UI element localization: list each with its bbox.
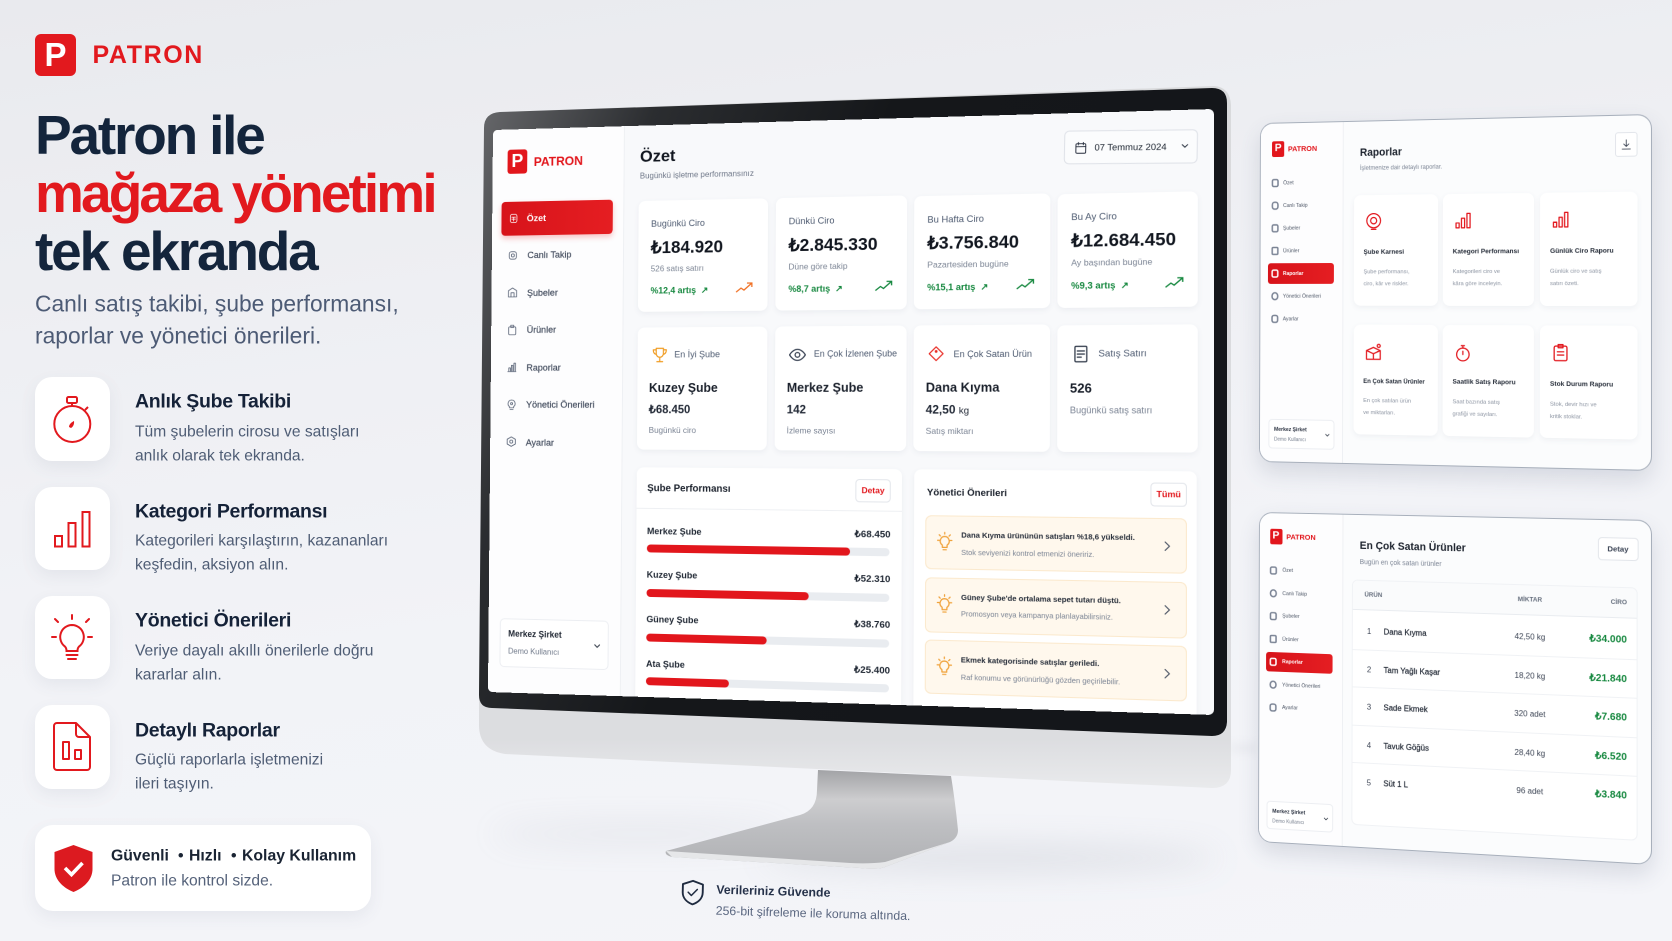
row: Süt 1 L: 5 — [1367, 779, 1371, 788]
icon: stopwatch — [35, 377, 110, 461]
bar row: Güney Şube: Güney Şube — [646, 614, 698, 625]
KPI card: Bu Ay Ciro: ₺12.684.450 — [1071, 229, 1176, 251]
Ürünler sidebar: P — [1272, 530, 1279, 542]
bar row: Merkez Şube — [646, 526, 891, 556]
report card: Günlük Ciro Raporu: Günlük ciro ve satış — [1550, 269, 1602, 275]
row: Süt 1 L: ₺3.840 — [1595, 789, 1627, 802]
row: Sade Ekmek: 320 adet — [1514, 709, 1545, 719]
row: Tam Yağlı Kaşar: 18,20 kg — [1515, 671, 1545, 681]
report card: Stok Durum Raporu — [1540, 325, 1638, 440]
page heading: Bugünkü işletme performansınız — [640, 169, 754, 181]
KPI card: Bu Hafta Ciro — [914, 193, 1050, 309]
report card: Şube Karnesi: Şube performansı, — [1363, 269, 1409, 275]
report card: Günlük Ciro Raporu: satırı özeti. — [1550, 281, 1579, 287]
button: Detay — [1598, 537, 1638, 561]
panel: Raporlar screen — [1259, 114, 1652, 471]
highlight card: Satış Satırı: Bugünkü satış satırı — [1070, 405, 1152, 416]
highlight card: En Çok İzlenen Şube: İzleme sayısı — [787, 425, 835, 436]
report card: En Çok Satan Ürünler — [1354, 325, 1438, 436]
icon: outline shield — [682, 880, 704, 906]
callout: Güvenli Hızlı Kolay Kullanım: • — [231, 848, 237, 865]
KPI card: Bu Ay Ciro: Ay başından bugüne — [1071, 256, 1152, 268]
Ürünler sidebar: PATRON — [1286, 532, 1316, 542]
highlight card: Satış Satırı: Satış Satırı — [1098, 348, 1147, 359]
report card: Stok Durum Raporu: Stok, devir hızı ve — [1550, 402, 1597, 408]
report card: En Çok Satan Ürünler: En çok satılan ürün — [1363, 398, 1411, 405]
Raporlar sidebar: Özet — [1283, 180, 1294, 186]
Ürünler sidebar: Şubeler — [1282, 613, 1300, 620]
sidebar logo: P — [511, 151, 523, 172]
KPI card: Bu Hafta Ciro: Bu Hafta Ciro — [927, 214, 984, 225]
highlight card: En İyi Şube: ₺68.450 — [649, 403, 690, 416]
report card: Kategori Performansı — [1443, 193, 1534, 306]
highlight card: En Çok Satan Ürün — [913, 324, 1050, 452]
highlight card: En Çok İzlenen Şube: En Çok İzlenen Şube — [814, 349, 897, 359]
feature: Detaylı Raporlar: Güçlü raporlarla işletmenizi — [135, 751, 323, 768]
feature: Anlık Şube Takibi: Anlık Şube Takibi — [135, 391, 291, 413]
row: Tam Yağlı Kaşar: Tam Yağlı Kaşar — [1384, 666, 1440, 677]
row: Dana Kıyma: 42,50 kg — [1515, 632, 1545, 642]
security note: Verileriniz Güvende — [682, 880, 911, 923]
callout: Güvenli Hızlı Kolay Kullanım: Hızlı — [189, 848, 221, 865]
bar row: Ata Şube: ₺25.400 — [854, 664, 890, 676]
nav items: Ayarlar — [526, 437, 554, 448]
nav items — [506, 249, 595, 448]
suggestion 3: Raf konumu ve görünürlüğü gözden geçirilebilir. — [961, 672, 1120, 686]
Raporlar sidebar: Canlı Takip — [1283, 202, 1308, 208]
KPI card: Bu Ay Ciro: Bu Ay Ciro — [1071, 211, 1117, 222]
Raporlar sidebar: PATRON — [1288, 144, 1317, 153]
row: Dana Kıyma: 1 — [1367, 627, 1371, 636]
date picker — [1064, 129, 1198, 164]
report card: Günlük Ciro Raporu — [1540, 192, 1638, 306]
page heading — [640, 146, 754, 181]
report card: Stok Durum Raporu: kritik stoklar. — [1550, 414, 1582, 421]
feature: Yönetici Önerileri: kararlar alın. — [135, 666, 222, 683]
suggestion 2: Promosyon veya kampanya planlayabilirsiniz. — [961, 610, 1113, 622]
report card: Şube Karnesi: Şube Karnesi — [1364, 249, 1404, 256]
feature: Detaylı Raporlar — [35, 705, 323, 793]
nav active: Özet — [501, 200, 613, 236]
feature: Anlık Şube Takibi: Tüm şubelerin cirosu ve satışları — [135, 423, 359, 440]
security note: Verileriniz Güvende: Verileriniz Güvende — [716, 883, 831, 900]
Ürünler sidebar: Canlı Takip — [1282, 591, 1307, 597]
icon: P mark: P — [44, 36, 66, 73]
highlight card: En Çok İzlenen Şube: Merkez Şube — [787, 381, 863, 395]
sidebar logo: PATRON — [534, 153, 583, 169]
suggestion 1 — [925, 515, 1187, 574]
icon: bar chart — [35, 487, 110, 570]
highlight card: En İyi Şube: Bugünkü ciro — [649, 425, 696, 435]
Ürünler heading: En Çok Satan Ürünler — [1360, 540, 1466, 555]
report card: Şube Karnesi: ciro, kâr ve riskler. — [1363, 281, 1408, 287]
feature: Yönetici Önerileri: Veriye dayalı akıllı önerilerle doğru — [135, 642, 373, 659]
main dashboard screen — [488, 109, 1214, 715]
feature: Detaylı Raporlar: ileri taşıyın. — [135, 775, 214, 792]
panel: Yönetici Önerileri — [913, 469, 1197, 733]
highlight card: En Çok Satan Ürün: 42,50 kg — [926, 403, 969, 416]
report card: Saatlik Satış Raporu: Saat bazında satış — [1452, 399, 1500, 406]
download button — [1615, 132, 1638, 156]
KPI card: Dünkü Ciro: %8,7 artış ↗ — [788, 283, 843, 294]
row: Tavuk Göğüs: ₺6.520 — [1595, 750, 1627, 763]
feature: Anlık Şube Takibi — [35, 377, 359, 465]
feature: Kategori Performansı: Kategori Performansı — [135, 501, 327, 523]
feature: Kategori Performansı: keşfedin, aksiyon alın. — [135, 556, 288, 573]
row: Tavuk Göğüs: Tavuk Göğüs — [1383, 742, 1429, 753]
bar row: Kuzey Şube: ₺52.310 — [854, 573, 890, 585]
nav items: Canlı Takip — [527, 249, 572, 261]
KPI card: Bu Hafta Ciro: %15,1 artış ↗ — [927, 282, 988, 293]
callout: Güvenli Hızlı Kolay Kullanım: Patron ile kontrol sizde. — [111, 872, 273, 889]
user box — [499, 618, 609, 670]
row: Dana Kıyma: ₺34.000 — [1589, 633, 1627, 646]
KPI card: Bu Ay Ciro — [1057, 191, 1198, 308]
highlight card: En İyi Şube: Kuzey Şube — [649, 381, 718, 395]
Raporlar sidebar: Ürünler — [1283, 248, 1299, 254]
Ürünler heading — [1360, 540, 1466, 567]
report card: Kategori Performansı: Kategori Performansı — [1453, 248, 1519, 256]
report card: Kategori Performansı: Kategorileri ciro ve — [1453, 269, 1500, 275]
bar row: Ata Şube: Ata Şube — [646, 659, 685, 670]
KPI card: Bugünkü Ciro: Bugünkü Ciro — [651, 218, 705, 229]
highlight card: En İyi Şube — [637, 327, 767, 450]
suggestion 2 — [925, 577, 1187, 638]
icon: report document — [35, 705, 110, 789]
bar row: Merkez Şube: ₺68.450 — [855, 528, 891, 540]
KPI card: Bu Ay Ciro: %9,3 artış ↗ — [1071, 280, 1129, 291]
sidebar — [488, 126, 625, 696]
button: Detay: Detay — [861, 485, 885, 495]
button: Detay: Detay — [1607, 544, 1629, 554]
subtitle: Canlı satış takibi, şube performansı, — [35, 291, 399, 317]
feature: Kategori Performansı: Kategorileri karşılaştırın, kazananları — [135, 532, 388, 549]
Raporlar sidebar: P — [1275, 142, 1282, 154]
page heading: Özet — [640, 146, 676, 166]
highlight card: En Çok İzlenen Şube: 142 — [787, 403, 806, 416]
Ürünler sidebar: Ayarlar — [1282, 705, 1298, 711]
row: Dana Kıyma: Dana Kıyma — [1384, 628, 1426, 638]
Ürünler sidebar: Yönetici Önerileri — [1282, 682, 1320, 689]
icon: P mark — [35, 34, 76, 76]
highlight card: En Çok Satan Ürün: Satış miktarı — [926, 426, 973, 436]
report card: Saatlik Satış Raporu: Saatlik Satış Raporu — [1452, 379, 1516, 386]
highlight card: En Çok Satan Ürün: Dana Kıyma — [926, 380, 999, 395]
bar row: Güney Şube — [646, 614, 890, 648]
row: Tavuk Göğüs — [1352, 725, 1639, 777]
report card: Saatlik Satış Raporu — [1443, 325, 1534, 438]
report card: En Çok Satan Ürünler: ve miktarları. — [1363, 410, 1395, 416]
sidebar logo — [508, 149, 583, 174]
row: Tavuk Göğüs: 4 — [1367, 741, 1371, 750]
report card: Kategori Performansı: kâra göre inceleyin. — [1453, 281, 1502, 287]
row: Süt 1 L — [1366, 779, 1627, 802]
KPI card: Bugünkü Ciro: ₺184.920 — [651, 236, 723, 257]
table header: MİKTAR — [1518, 596, 1542, 604]
suggestion 1: Stok seviyenizi kontrol etmenizi öneririz. — [961, 547, 1094, 559]
feature: Kategori Performansı — [35, 487, 388, 574]
callout: Güvenli Hızlı Kolay Kullanım: Kolay Kullanım — [242, 848, 356, 865]
panel heading: Şube Performansı — [647, 483, 731, 495]
row: Tam Yağlı Kaşar — [1353, 650, 1639, 699]
button: Tümü — [1150, 482, 1187, 506]
Ürünler heading: Bugün en çok satan ürünler — [1360, 558, 1442, 567]
row: Süt 1 L: Süt 1 L — [1383, 779, 1408, 790]
products table — [1351, 579, 1638, 840]
row: Sade Ekmek — [1353, 687, 1639, 738]
row: Tam Yağlı Kaşar: 2 — [1367, 665, 1371, 674]
Raporlar sidebar — [1260, 122, 1344, 463]
report card: Saatlik Satış Raporu: grafiği ve sayıları. — [1452, 411, 1497, 418]
KPI card: Dünkü Ciro — [775, 195, 907, 311]
Raporlar sidebar: Raporlar — [1283, 270, 1303, 276]
suggestion 1: Dana Kıyma ürününün satışları %18,6 yükseldi. — [961, 530, 1135, 542]
KPI card: Bugünkü Ciro: 526 satış satırı — [651, 263, 704, 273]
report card: En Çok Satan Ürünler: En Çok Satan Ürünler — [1363, 378, 1425, 386]
Raporlar sidebar: Demo Kullanıcı — [1274, 437, 1306, 443]
highlight card: En İyi Şube: En İyi Şube — [674, 349, 720, 359]
highlight card: En Çok Satan Ürün: En Çok Satan Ürün — [954, 349, 1032, 359]
nav items: Yönetici Önerileri — [526, 400, 595, 410]
KPI card: Dünkü Ciro: ₺2.845.330 — [789, 233, 878, 255]
title: mağaza yönetimi — [35, 162, 435, 224]
KPI card: Bu Hafta Ciro: Pazartesiden bugüne — [927, 258, 1009, 270]
feature: Anlık Şube Takibi: anlık olarak tek ekranda. — [135, 447, 305, 464]
title: tek ekranda — [35, 220, 317, 282]
highlight card: Satış Satırı — [1057, 324, 1198, 453]
date picker: 07 Temmuz 2024 — [1094, 142, 1167, 153]
report card: Günlük Ciro Raporu: Günlük Ciro Raporu — [1550, 248, 1614, 255]
Ürünler sidebar: Ürünler — [1282, 636, 1299, 643]
user box: Merkez Şirket — [508, 629, 562, 640]
security note: Verileriniz Güvende: 256-bit şifreleme ile koruma altında. — [716, 904, 911, 923]
row: Süt 1 L: 96 adet — [1516, 786, 1543, 797]
panel heading: Yönetici Önerileri — [927, 486, 1007, 498]
nav items: Ürünler — [527, 325, 556, 336]
row: Tam Yağlı Kaşar: ₺21.840 — [1589, 672, 1627, 685]
Raporlar sidebar: Yönetici Önerileri — [1283, 293, 1321, 299]
bar row: Kuzey Şube — [646, 570, 890, 602]
bar row: Kuzey Şube: Kuzey Şube — [647, 570, 697, 581]
Raporlar heading — [1360, 146, 1442, 172]
KPI card: Bu Hafta Ciro: ₺3.756.840 — [927, 231, 1019, 253]
table header — [1353, 580, 1639, 619]
Ürünler sidebar: Demo Kullanıcı — [1272, 818, 1304, 826]
panel: Şube Performansı — [635, 467, 902, 723]
suggestion 3: Ekmek kategorisinde satışlar geriledi. — [961, 655, 1099, 668]
Raporlar heading: Raporlar — [1360, 146, 1402, 159]
report card: Stok Durum Raporu: Stok Durum Raporu — [1550, 381, 1613, 389]
report card: Şube Karnesi — [1354, 194, 1438, 306]
Raporlar sidebar: Ayarlar — [1283, 316, 1298, 322]
feature: Yönetici Önerileri: Yönetici Önerileri — [135, 610, 291, 632]
button: Detay — [855, 479, 891, 503]
nav items: Raporlar — [526, 362, 561, 373]
KPI card: Dünkü Ciro: Düne göre takip — [788, 261, 847, 272]
callout: Güvenli Hızlı Kolay Kullanım — [35, 825, 371, 911]
subtitle — [35, 291, 399, 348]
subtitle: raporlar ve yönetici önerileri. — [35, 322, 321, 348]
Ürünler sidebar — [1259, 513, 1343, 846]
suggestion 3 — [925, 639, 1187, 702]
table header: CİRO — [1611, 599, 1627, 607]
title: Patron ile — [35, 104, 264, 166]
highlight card: En Çok İzlenen Şube — [775, 326, 907, 451]
user box: Demo Kullanıcı — [508, 647, 559, 657]
panel: En Çok Satan Ürünler screen — [1258, 512, 1652, 865]
callout: Güvenli Hızlı Kolay Kullanım: • — [178, 848, 184, 865]
nav items: Şubeler — [527, 287, 558, 298]
KPI card: Bugünkü Ciro — [638, 198, 768, 312]
Raporlar heading: İşletmenize dair detaylı raporlar. — [1360, 164, 1442, 171]
brand logo — [35, 34, 204, 76]
suggestion 2: Güney Şube'de ortalama sepet tutarı düştü. — [961, 593, 1121, 605]
highlight card: Satış Satırı: 526 — [1070, 381, 1092, 396]
Ürünler sidebar: Özet — [1282, 568, 1293, 574]
button: Tümü: Tümü — [1156, 488, 1181, 499]
icon: light bulb — [35, 596, 110, 679]
row: Sade Ekmek: 3 — [1367, 703, 1371, 712]
bar row: Ata Şube — [646, 659, 890, 692]
row: Sade Ekmek: ₺7.680 — [1595, 711, 1627, 724]
Ürünler sidebar: Raporlar — [1282, 659, 1303, 666]
bar row: Merkez Şube: Merkez Şube — [647, 526, 702, 536]
nav active: Özet: Özet — [527, 213, 546, 224]
row: Sade Ekmek: Sade Ekmek — [1383, 704, 1428, 714]
KPI card: Dünkü Ciro: Dünkü Ciro — [789, 215, 834, 226]
KPI card: Bugünkü Ciro: %12,4 artış ↗ — [651, 285, 708, 295]
table header: ÜRÜN — [1364, 592, 1382, 599]
Raporlar sidebar: Şubeler — [1283, 225, 1300, 231]
feature: Yönetici Önerileri — [35, 596, 373, 683]
bar row: Güney Şube: ₺38.760 — [854, 619, 890, 631]
Ürünler sidebar: Merkez Şirket — [1272, 808, 1305, 816]
icon: red shield — [54, 845, 92, 892]
brand logo: PATRON — [92, 41, 204, 69]
Raporlar sidebar: Merkez Şirket — [1274, 427, 1307, 433]
row: Dana Kıyma — [1353, 610, 1639, 660]
feature: Detaylı Raporlar: Detaylı Raporlar — [135, 720, 280, 742]
row: Tavuk Göğüs: 28,40 kg — [1514, 748, 1545, 758]
title — [35, 104, 435, 282]
callout: Güvenli Hızlı Kolay Kullanım: Güvenli — [111, 848, 169, 865]
